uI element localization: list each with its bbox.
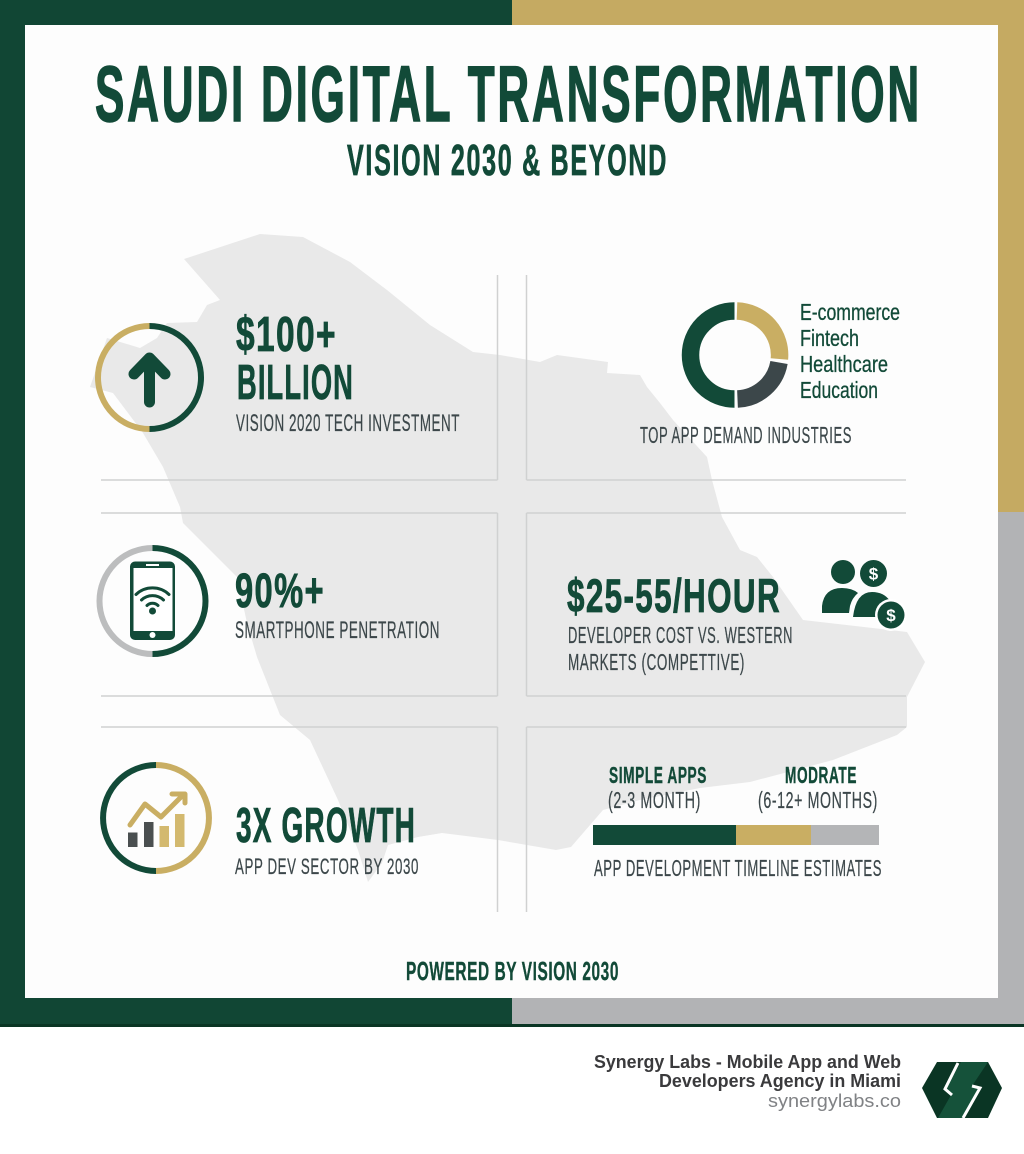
caption: developer cost: MARKETS (COMPETTIVE) xyxy=(568,649,745,675)
stat: billion: BILLION xyxy=(237,356,354,410)
stat: hourly rate: $25-55/HOUR xyxy=(567,569,781,622)
icon: growth chart in ring xyxy=(103,765,209,871)
caption: developer cost xyxy=(568,622,793,675)
caption: smartphone penetration: SMARTPHONE PENETRATION xyxy=(235,617,440,644)
panel: app development timeline xyxy=(593,762,882,881)
tagline: POWERED BY VISION 2030 xyxy=(406,956,619,986)
footer: company text: synergylabs.co xyxy=(768,1091,901,1111)
icon: people with dollar coins: $ xyxy=(886,606,896,625)
label: simple apps: (2-3 MONTH) xyxy=(608,787,701,813)
legend: industries xyxy=(800,299,900,403)
icon: people with dollar coins xyxy=(822,560,907,631)
footer: logo xyxy=(922,1062,1002,1118)
label: simple apps xyxy=(608,762,707,813)
panel: growth xyxy=(103,765,419,879)
footer: company text xyxy=(594,1052,901,1111)
timeline bar xyxy=(593,825,879,845)
legend: industries: Education xyxy=(800,377,878,403)
background map of Saudi Arabia xyxy=(90,234,925,882)
panel: top app demand industries xyxy=(640,299,900,448)
stat: $100+: $100+ xyxy=(236,308,337,362)
footer: company text: Developers Agency in Miami xyxy=(659,1071,901,1091)
panel: developer cost xyxy=(567,560,907,675)
icon: phone with wifi in ring xyxy=(100,548,206,654)
legend: industries: Fintech xyxy=(800,325,859,351)
legend: industries: E-commerce xyxy=(800,299,900,325)
legend: industries: Healthcare xyxy=(800,351,888,377)
stat: 90%+: 90%+ xyxy=(235,565,325,618)
caption: tech investment: VISION 2020 TECH INVESTMENT xyxy=(236,410,460,437)
label: moderate xyxy=(758,762,878,813)
caption: developer cost: DEVELOPER COST VS. WESTERN xyxy=(568,622,793,648)
label: moderate: MODRATE xyxy=(785,762,857,788)
stat: 3x growth: 3X GROWTH xyxy=(236,799,416,853)
icon: people with dollar coins: $ xyxy=(869,564,879,584)
subtitle: VISION 2030 & BEYOND xyxy=(347,136,668,185)
caption: industries: TOP APP DEMAND INDUSTRIES xyxy=(640,422,852,448)
label: moderate: (6-12+ MONTHS) xyxy=(758,787,878,813)
caption: app dev sector: APP DEV SECTOR BY 2030 xyxy=(235,854,419,879)
donut chart xyxy=(690,311,780,399)
panel: smartphone penetration xyxy=(100,548,440,654)
footer: company text: Synergy Labs - Mobile App and Web xyxy=(594,1052,901,1072)
icon: up arrow in ring xyxy=(98,326,201,429)
label: simple apps: SIMPLE APPS xyxy=(609,762,707,788)
panel: tech investment xyxy=(98,308,460,437)
